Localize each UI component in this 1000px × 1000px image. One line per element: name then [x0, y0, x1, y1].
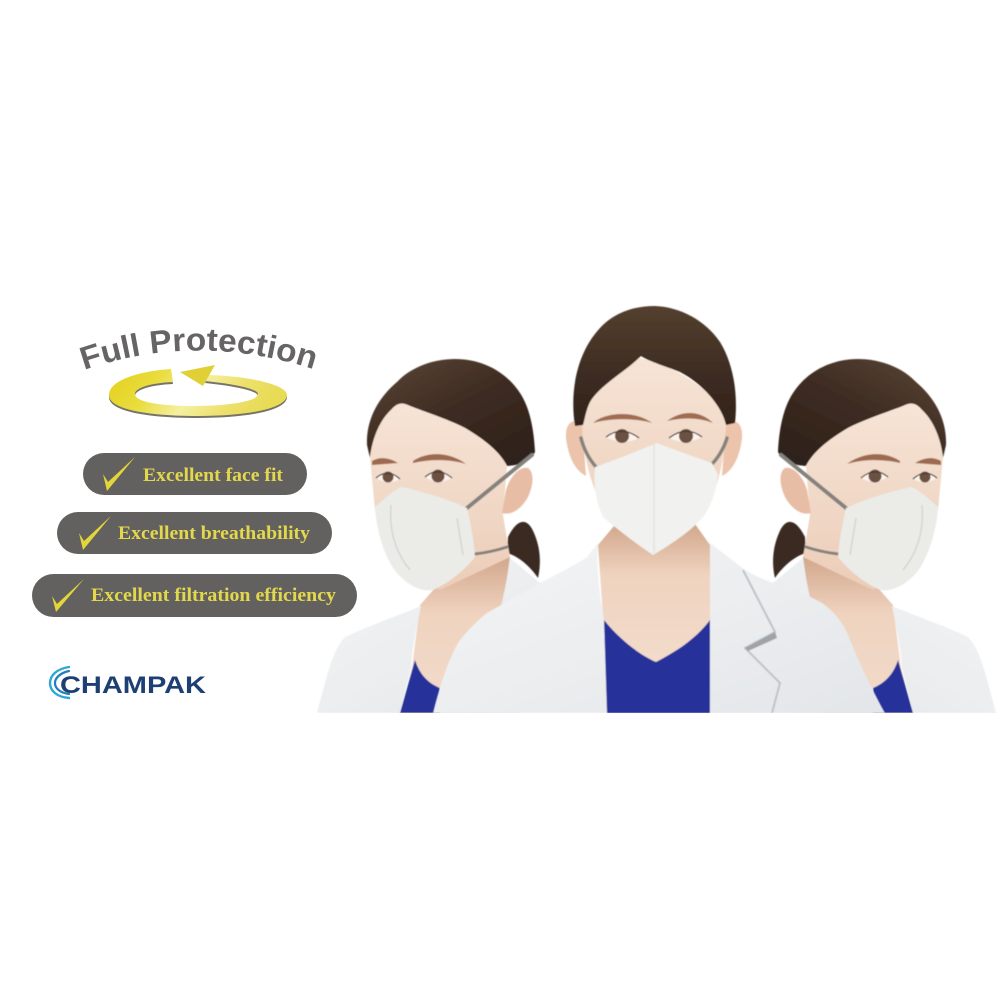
- icon: circular yellow arrow: [109, 365, 287, 418]
- eyebrows: [372, 454, 466, 465]
- pill: excellent filtration efficiency: [32, 574, 357, 617]
- figure: left woman wearing mask in profile: [317, 359, 560, 720]
- ears: [566, 421, 742, 476]
- photo group: three women in masks: [317, 306, 996, 720]
- ponytail: [507, 522, 540, 578]
- mask straps: [467, 455, 532, 554]
- logo: Champak: [50, 667, 207, 699]
- neck: [400, 557, 510, 720]
- logo wordmark: CHAMPAK: [60, 672, 207, 699]
- face mask: [594, 443, 718, 555]
- face: [370, 404, 510, 590]
- hair: [367, 359, 535, 466]
- mask straps: [581, 438, 727, 467]
- heading: Full Protection: Full Protection: [80, 330, 316, 370]
- mask seam: [391, 505, 463, 570]
- pill text: Excellent filtration efficiency: [91, 586, 337, 606]
- hair: [573, 306, 736, 426]
- face mask: [375, 487, 475, 590]
- mask center fold: [654, 444, 655, 552]
- eyes: [376, 470, 452, 482]
- neck: [598, 524, 710, 670]
- figure: right woman wearing mask in profile: [753, 359, 996, 720]
- icon: check mark: [103, 457, 135, 491]
- ear: [502, 468, 532, 514]
- pill text: Excellent breathability: [118, 524, 311, 544]
- coat lapel: [743, 570, 780, 713]
- figure: center woman wearing mask facing forward: [433, 306, 885, 713]
- lapel shadow: [745, 632, 777, 651]
- white coat: [317, 558, 560, 713]
- icon: check mark: [52, 579, 84, 612]
- logo arcs: [50, 667, 69, 698]
- pill: excellent face fit: [83, 453, 307, 495]
- pill: excellent breathability: [57, 512, 332, 554]
- white coat: [433, 543, 885, 713]
- pill text: Excellent face fit: [143, 466, 284, 486]
- blue scrub top: [400, 660, 440, 713]
- face: [582, 357, 726, 490]
- blue scrub top: [604, 620, 710, 713]
- eyebrows: [593, 413, 713, 423]
- eyes: [606, 429, 702, 443]
- icon: check mark: [79, 516, 111, 550]
- infographic canvas: [32, 305, 996, 713]
